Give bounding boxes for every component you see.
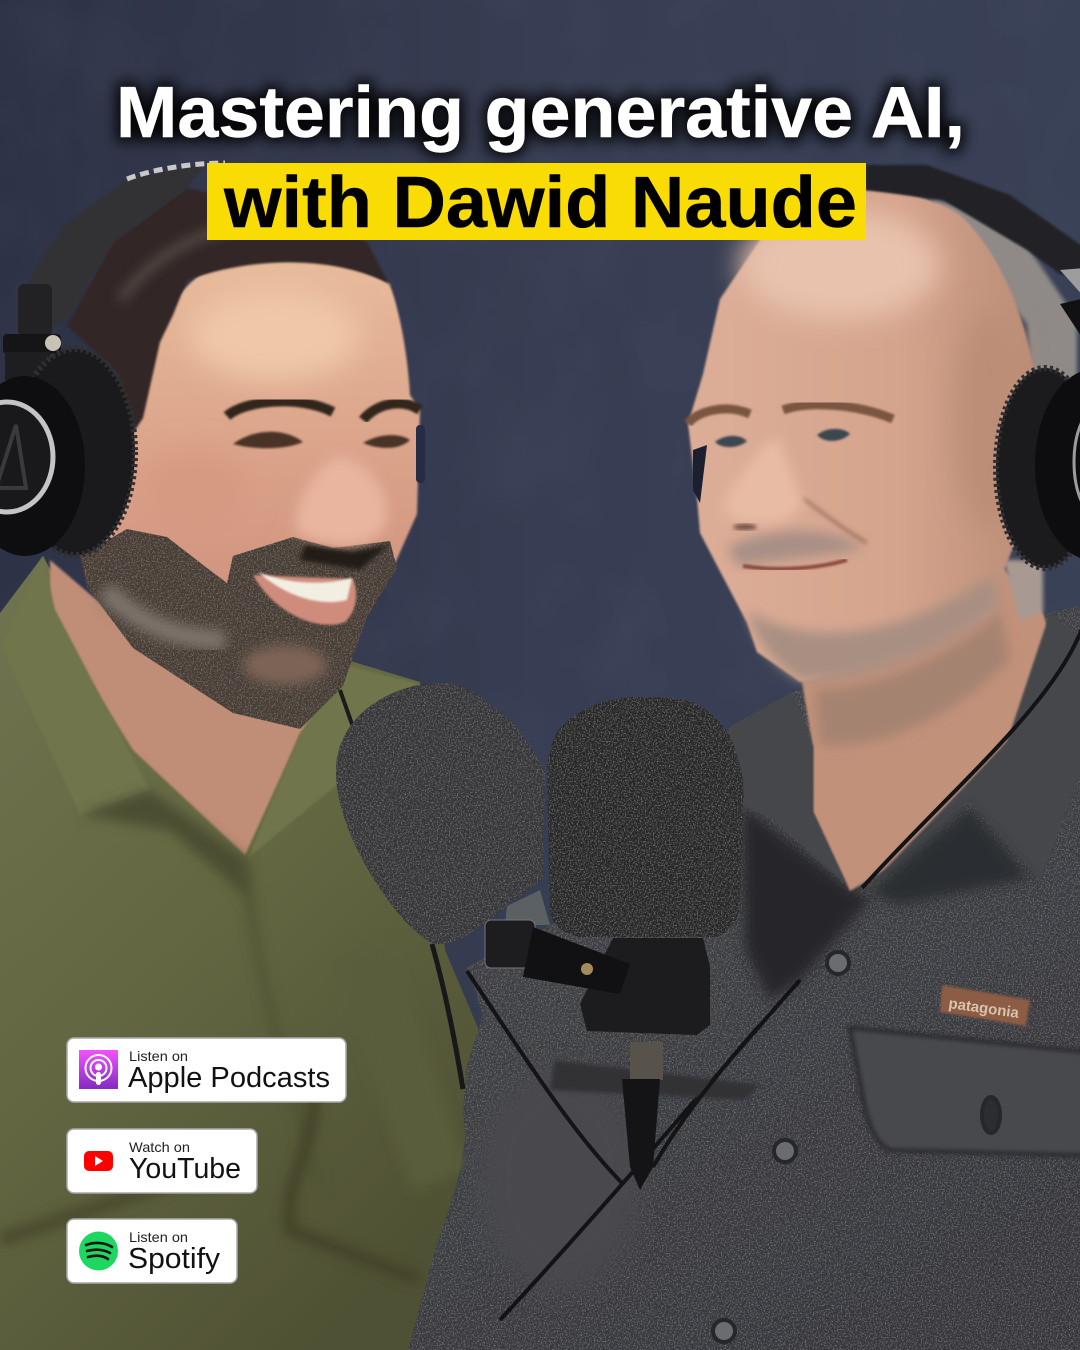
left ear pad xyxy=(15,349,135,555)
right guest side hair xyxy=(930,198,1077,400)
right guest stubble xyxy=(748,575,1000,680)
left host beard xyxy=(80,529,397,729)
XLR metal xyxy=(630,1042,663,1080)
left host nostril shadow xyxy=(300,545,388,570)
patagonia logo patch xyxy=(940,985,1030,1026)
left host hair highlights xyxy=(120,225,240,300)
title line 1 shadow: Mastering generative AI, xyxy=(116,73,965,153)
right guest head xyxy=(688,190,1040,682)
right ear pad xyxy=(996,368,1080,568)
microphone: right foam windscreen xyxy=(547,697,744,937)
badge: Spotify xyxy=(67,1219,237,1283)
left host placket shadow xyxy=(80,790,250,900)
left host cheek xyxy=(140,450,250,530)
right guest shirt xyxy=(400,600,1080,1350)
right guest temple shade xyxy=(955,310,1025,530)
mic cables xyxy=(467,971,760,1183)
right guest eyes xyxy=(715,429,850,447)
right guest glasses glimpse xyxy=(693,445,707,503)
headphones: right guest xyxy=(866,165,1080,568)
right guest eyebrows xyxy=(688,405,893,424)
badge: YouTube: Watch on xyxy=(129,1139,190,1155)
left host shirt folds xyxy=(0,860,440,1280)
badge: YouTube: YouTube xyxy=(129,1153,241,1185)
left yoke xyxy=(3,284,61,380)
left headband print xyxy=(127,163,225,179)
right ear cup xyxy=(1035,369,1080,561)
microphone: left foam windscreen xyxy=(336,683,545,944)
right guest placket xyxy=(743,806,870,1000)
left host neck xyxy=(50,560,340,855)
patagonia logo patch: patagonia xyxy=(947,995,1021,1022)
left headband xyxy=(20,163,207,330)
headphones: left host xyxy=(0,163,225,556)
mic cables: left xyxy=(432,944,463,1089)
mount arm xyxy=(523,927,630,994)
left cup logo xyxy=(0,425,26,488)
left host eyebrows xyxy=(227,401,420,420)
mount cone xyxy=(505,890,550,925)
title line 2 with highlight: with Dawid Naude xyxy=(223,163,857,243)
left host teeth xyxy=(258,572,352,602)
badge: Spotify: Spotify xyxy=(128,1243,221,1275)
right guest collar xyxy=(730,613,1080,895)
right guest shirt flap xyxy=(550,1060,760,1100)
left host lower lip xyxy=(253,575,356,625)
icon: spotify xyxy=(79,1232,118,1270)
left host face xyxy=(100,259,420,700)
right guest nasolabial line xyxy=(803,498,867,543)
right guest moustache shadow xyxy=(727,531,865,566)
title line 1: Mastering generative AI, xyxy=(116,73,965,153)
right slider xyxy=(1060,268,1080,298)
badge: YouTube xyxy=(67,1129,257,1193)
badge: Spotify: Listen on xyxy=(129,1229,188,1245)
left host forehead highlight xyxy=(190,290,360,380)
right guest scalp highlight xyxy=(740,210,940,320)
badge: Apple Podcasts: Apple Podcasts xyxy=(128,1062,330,1094)
left host collar xyxy=(0,556,420,858)
icon: podcasts xyxy=(79,1050,118,1089)
badge: Apple Podcasts: Listen on xyxy=(129,1048,188,1064)
shock mount body xyxy=(580,938,710,1035)
left ear cup xyxy=(0,376,85,556)
left host glasses glimpse xyxy=(416,425,425,483)
left host eyes xyxy=(233,432,410,448)
left host lapel mic cable xyxy=(340,690,353,727)
right cup ring xyxy=(1074,406,1080,518)
right guest pocket xyxy=(850,1028,1080,1155)
left host beard grey xyxy=(105,590,225,640)
microphone: stand and mount xyxy=(467,890,760,1190)
right guest mouth xyxy=(743,560,847,569)
left host nose xyxy=(296,456,387,545)
left cup ring xyxy=(0,402,53,512)
right guest neck xyxy=(800,568,1057,891)
right guest left chest light xyxy=(480,1070,640,1290)
left host hair xyxy=(67,188,397,433)
right guest cable xyxy=(500,620,1080,1320)
badge: Apple Podcasts xyxy=(67,1038,346,1102)
icon: youtube play xyxy=(84,1151,113,1171)
left host shirt xyxy=(0,556,483,1350)
left host chin skin tone xyxy=(243,645,327,685)
right guest nostril xyxy=(733,524,757,530)
person: right guest xyxy=(400,190,1080,1350)
mount bolt xyxy=(581,963,593,975)
right guest behind-ear skin xyxy=(1003,560,1043,620)
right headband xyxy=(866,165,1080,280)
right guest dark under collar xyxy=(870,807,1030,905)
person: left host xyxy=(0,188,483,1350)
right yoke xyxy=(1060,298,1080,342)
right guest nose xyxy=(724,440,803,524)
XLR connector xyxy=(622,1079,660,1190)
right guest buttons xyxy=(713,952,1000,1342)
mount cylinder xyxy=(485,920,535,968)
right guest neck shadow xyxy=(815,610,1010,746)
